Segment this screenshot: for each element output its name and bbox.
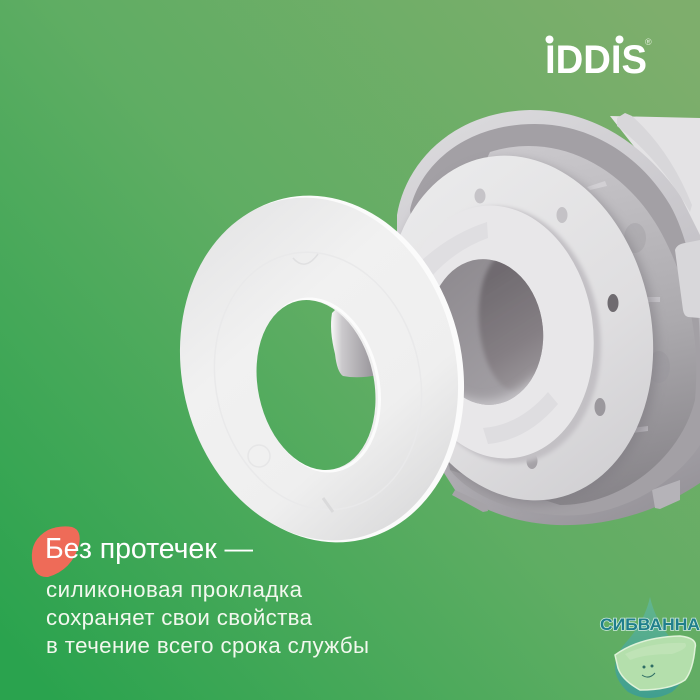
red accent blob <box>32 526 80 577</box>
lit inner edge of the hole <box>276 298 381 472</box>
tub face <box>642 664 655 677</box>
right clip <box>675 240 700 318</box>
back plate detail marks <box>624 223 646 253</box>
flange side shadow <box>359 134 689 530</box>
body line 2: сохраняет свои свойства <box>46 605 313 630</box>
product: white silicone gasket <box>180 196 464 542</box>
tab of the housing seen through gasket hole <box>331 310 374 378</box>
bottom lugs <box>452 490 488 512</box>
body line 1: силиконовая прокладка <box>46 577 303 602</box>
inner shaded recess <box>410 124 700 516</box>
raised inner collar shadow <box>391 194 617 476</box>
watermark wordmark: СИБВАННА <box>600 615 700 634</box>
back plate <box>420 146 696 505</box>
embossed inner ring <box>189 231 447 531</box>
locking notch top <box>617 113 692 212</box>
logo i dots <box>546 36 554 44</box>
raised inner collar <box>386 193 610 471</box>
bathtub inner rim <box>625 643 686 660</box>
body line 3: в течение всего срока службы <box>46 633 369 658</box>
housing cylinder going off-page <box>610 116 700 245</box>
brand logo: iDDiS <box>545 36 652 82</box>
white flange <box>356 131 684 525</box>
gasket face <box>180 198 458 540</box>
flange holes <box>474 188 486 204</box>
body text <box>46 577 369 658</box>
logo registered mark: ® <box>645 37 652 47</box>
product: grey drain housing <box>397 110 700 526</box>
logo wordmark: IDDIS <box>545 38 647 82</box>
watermark logo: Сибванна <box>600 597 700 698</box>
collar embossed part number <box>420 222 558 444</box>
central opening <box>422 253 550 411</box>
inner tube <box>464 260 544 405</box>
heading: Без протечек — <box>45 533 254 565</box>
gasket rim <box>245 196 464 542</box>
embossed marks <box>293 254 318 264</box>
outer ring <box>397 110 700 525</box>
droplet <box>615 597 686 698</box>
bathtub <box>615 636 695 690</box>
